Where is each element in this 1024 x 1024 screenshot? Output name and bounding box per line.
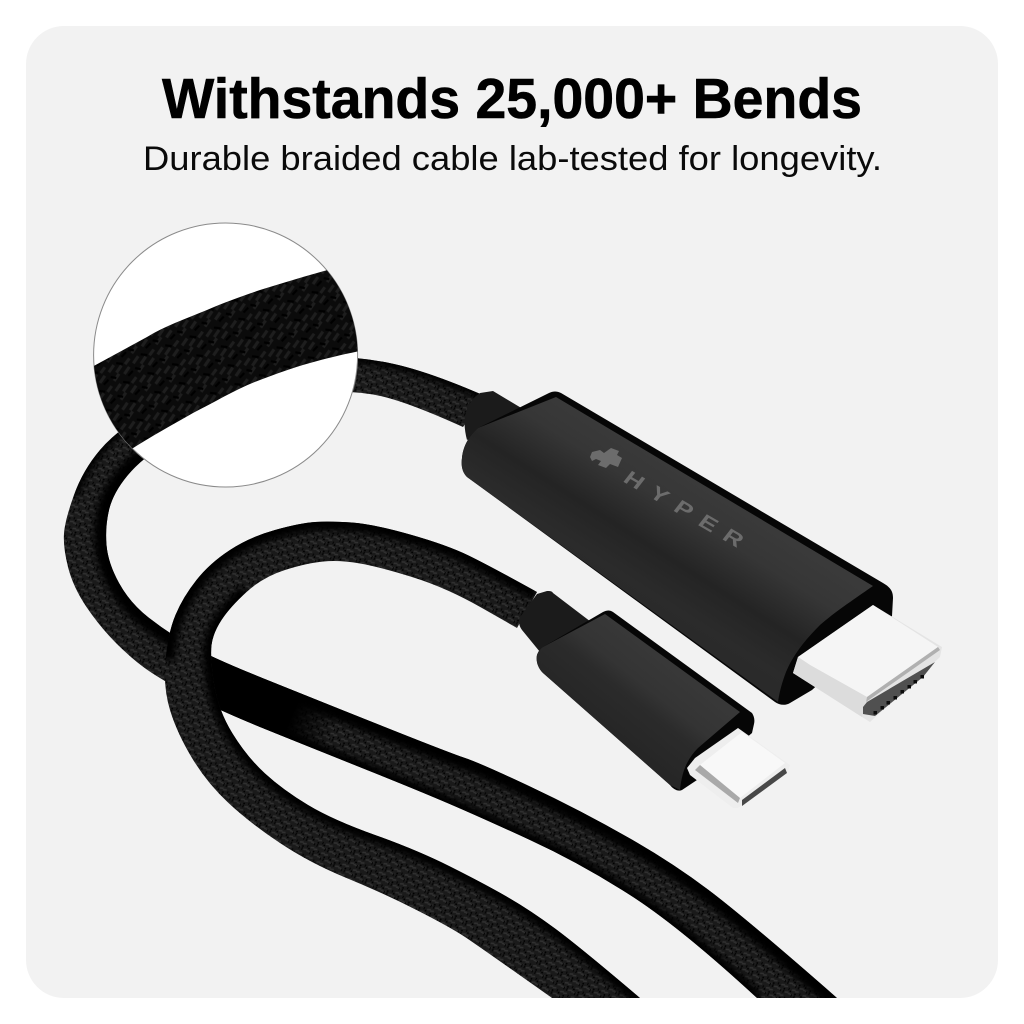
braided cable running from HDMI connector [64,357,837,998]
subtitle: Durable braided cable lab-tested for longevity. [143,140,882,178]
USB-C metal plug [687,728,790,808]
port opening [742,768,787,806]
USB-C connector body [537,610,754,791]
HDMI connector body [462,392,893,705]
logo mark [590,448,622,468]
magnified braid band [90,268,365,450]
title: Withstands 25,000+ Bends [162,67,862,131]
USB-C strain relief [519,591,595,652]
magnifier circle [90,223,365,487]
body silhouette [537,610,754,791]
plug opening [863,662,935,716]
contact pins [874,675,924,714]
HDMI metal plug [793,605,942,722]
brand logo [590,448,749,552]
brand wordmark: HYPER [619,467,749,552]
top face [462,397,873,702]
braided cable running from USB-C connector [165,522,640,998]
HDMI strain relief [465,391,528,440]
top face [537,614,740,790]
body silhouette [462,392,893,705]
